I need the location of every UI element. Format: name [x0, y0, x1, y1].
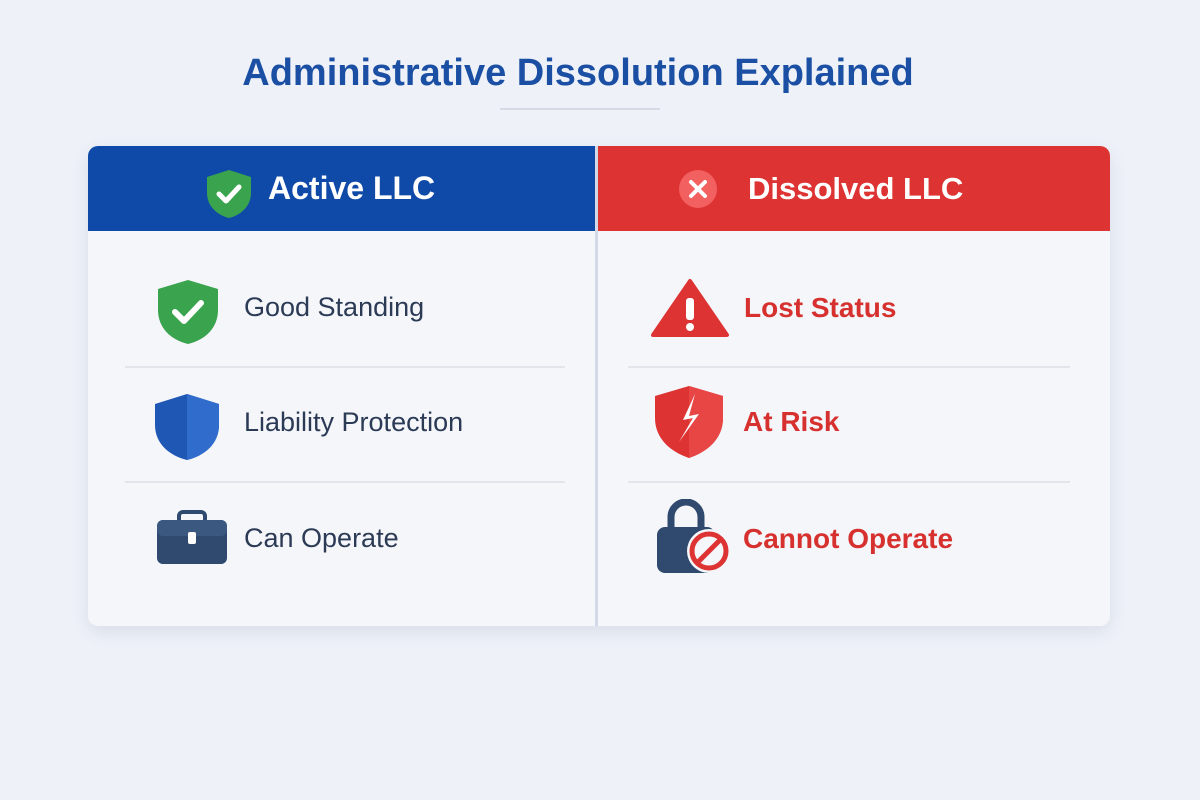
row: Cannot Operate: Cannot Operate: [743, 523, 953, 554]
row: Can Operate: [157, 510, 399, 564]
row: Good Standing: [158, 280, 424, 344]
icon: x circle: [679, 170, 717, 208]
row: Can Operate: Can Operate: [244, 523, 399, 553]
row: Liability Protection: Liability Protection: [244, 407, 463, 437]
row: At Risk: [655, 386, 840, 458]
row: Lost Status: Lost Status: [744, 292, 896, 323]
title: Administrative Dissolution Explained: [242, 52, 914, 94]
row: Liability Protection: [155, 394, 463, 460]
icon: green shield: [207, 170, 251, 218]
heading: Dissolved LLC: Dissolved LLC: [748, 171, 963, 206]
header: dissolved: [598, 146, 1110, 231]
row: At Risk: At Risk: [743, 406, 839, 437]
heading: Active LLC: Active LLC: [268, 170, 435, 206]
row: Lost Status: [651, 278, 896, 337]
header: active: [88, 146, 595, 231]
row: Cannot Operate: [657, 499, 953, 573]
card: [88, 146, 1110, 626]
row: Good Standing: Good Standing: [244, 292, 424, 322]
